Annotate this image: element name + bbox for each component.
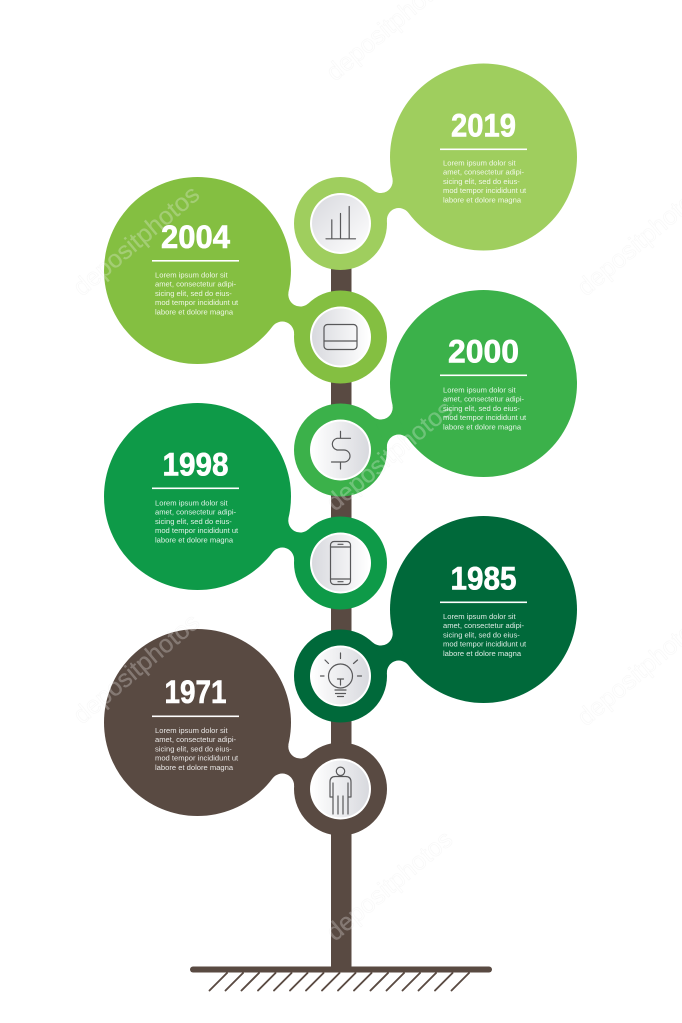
2000 text: labore et dolore magna	[443, 422, 522, 431]
icon: light bulb	[310, 646, 371, 706]
2000 rule	[440, 374, 527, 376]
panel: 1998	[104, 403, 387, 610]
2004 rule	[152, 260, 239, 262]
2019 year: 2019	[451, 108, 516, 144]
icon: person	[310, 758, 371, 820]
panel: 1971	[104, 629, 387, 836]
1998 bubble and node	[104, 403, 387, 610]
1971 year: 1971	[164, 674, 226, 710]
1971 bubble and node	[104, 629, 387, 836]
1971 rule	[152, 716, 239, 717]
2000 year: 2000	[448, 334, 519, 370]
2000 text: mod tempor incididunt ut	[443, 413, 527, 422]
1985 year: 1985	[450, 560, 516, 596]
2004 text: amet, consectetur adipi-	[155, 280, 237, 289]
icon: smartphone	[310, 532, 371, 594]
2004 text: mod tempor incididunt ut	[155, 298, 239, 307]
watermark: depositphotos	[321, 825, 458, 947]
icon: dollar sign	[310, 420, 371, 480]
1998 text: sicing elit, sed do eius-	[155, 517, 232, 526]
2019 text: amet, consectetur adipi-	[443, 168, 525, 177]
ground line	[190, 966, 492, 972]
1998 text: Lorem ipsum dolor sit	[155, 498, 228, 508]
1998 text: amet, consectetur adipi-	[155, 508, 237, 517]
ground hatching	[210, 973, 469, 990]
watermark: depositphotos	[68, 608, 205, 730]
1998 text: mod tempor incididunt ut	[155, 526, 239, 535]
2019 text: Lorem ipsum dolor sit	[443, 158, 516, 168]
1985 text: labore et dolore magna	[443, 649, 522, 658]
2000 text: Lorem ipsum dolor sit	[443, 386, 516, 394]
1998 text: labore et dolore magna	[155, 535, 234, 544]
1985 rule	[440, 602, 527, 603]
2019 text: sicing elit, sed do eius-	[443, 177, 520, 186]
2000 text: amet, consectetur adipi-	[443, 395, 525, 404]
1971 text: labore et dolore magna	[155, 763, 234, 772]
panel: 1985	[294, 516, 577, 722]
panel: 2019	[294, 64, 577, 270]
icon: device card	[310, 306, 371, 368]
1985 text: mod tempor incididunt ut	[443, 640, 527, 649]
1971 text: mod tempor incididunt ut	[155, 754, 239, 763]
panel: 2004	[104, 177, 387, 384]
1998 rule	[152, 488, 239, 489]
2004 bubble and node	[104, 177, 387, 384]
2000 text: sicing elit, sed do eius-	[443, 404, 520, 413]
1985 bubble and node	[294, 516, 577, 722]
2004 text: labore et dolore magna	[155, 307, 234, 316]
icon: bar chart	[310, 193, 371, 254]
2004 text: sicing elit, sed do eius-	[155, 289, 232, 298]
panel: 2000	[294, 290, 577, 496]
1985 text: amet, consectetur adipi-	[443, 621, 525, 630]
1985 text: Lorem ipsum dolor sit	[443, 612, 516, 621]
2004 text: Lorem ipsum dolor sit	[155, 270, 228, 280]
1985 text: sicing elit, sed do eius-	[443, 630, 520, 639]
2019 bubble and node	[294, 64, 577, 270]
2000 bubble and node	[294, 290, 577, 496]
1971 text: sicing elit, sed do eius-	[155, 744, 232, 753]
watermark: depositphotos	[68, 180, 205, 302]
1971 text: amet, consectetur adipi-	[155, 735, 237, 744]
2019 text: mod tempor incididunt ut	[443, 186, 527, 195]
1998 year: 1998	[162, 446, 228, 482]
tree trunk	[331, 224, 352, 970]
1971 text: Lorem ipsum dolor sit	[155, 726, 228, 735]
watermark: depositphotos	[321, 395, 458, 517]
2019 text: labore et dolore magna	[443, 195, 522, 204]
2004 year: 2004	[161, 219, 230, 255]
2019 rule	[440, 148, 527, 150]
